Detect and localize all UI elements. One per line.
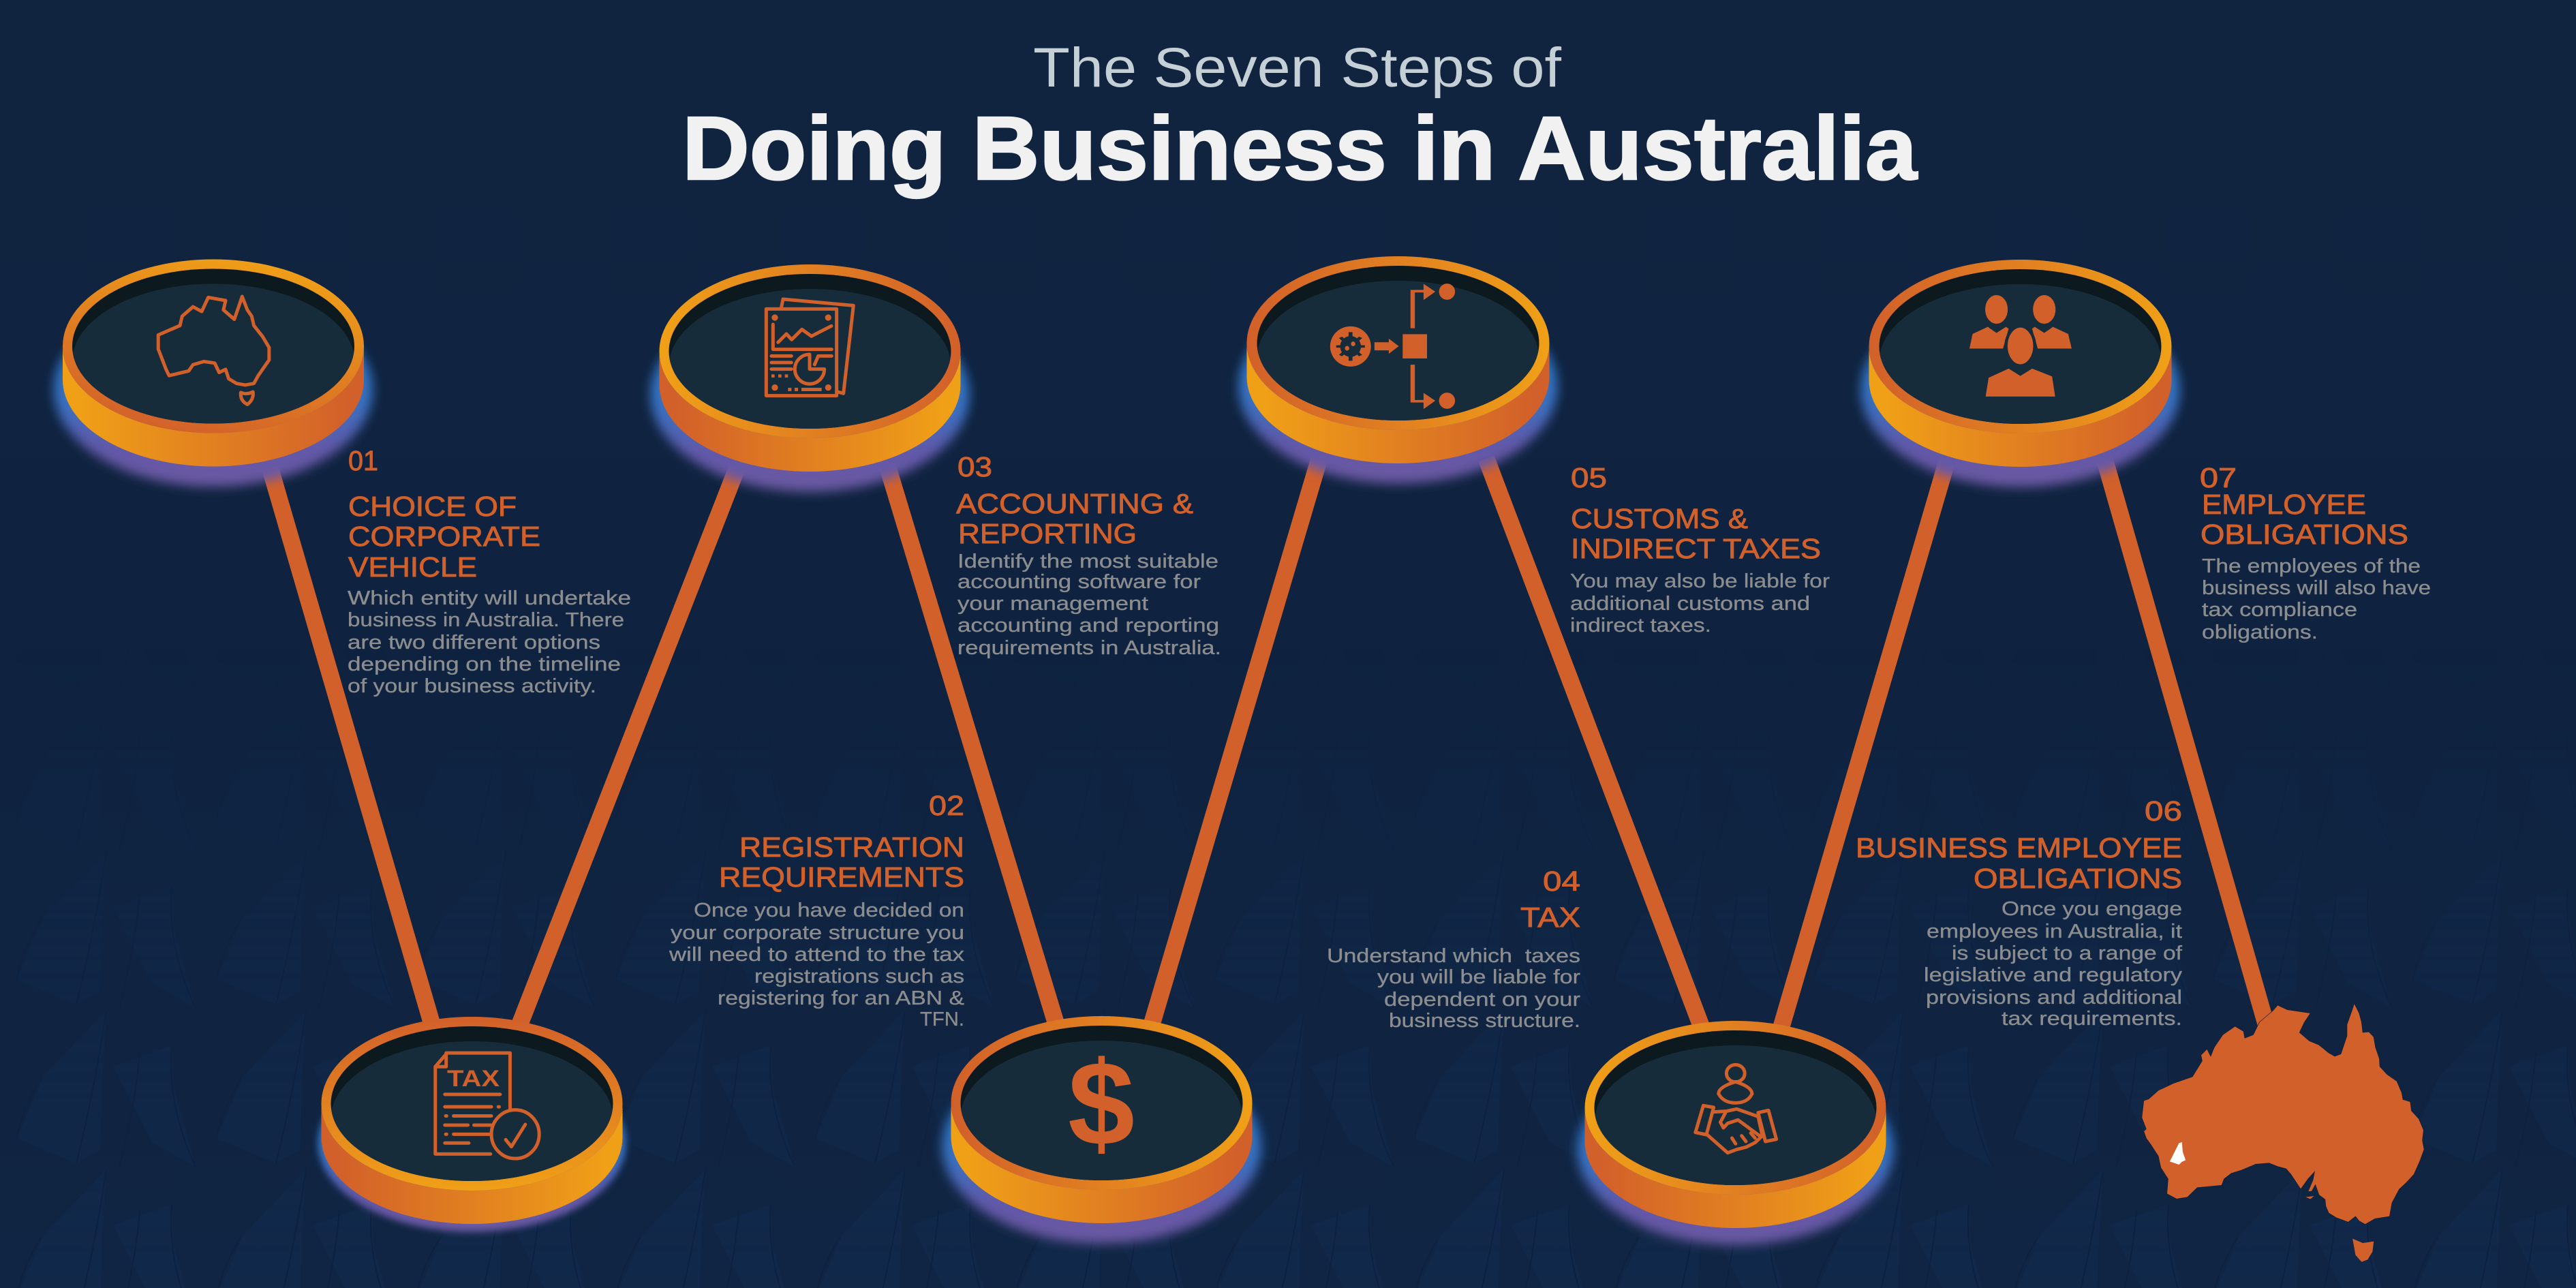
connecting zigzag lines: [266, 453, 2269, 1036]
step heading: ACCOUNTING &: [956, 488, 1193, 519]
step heading: CORPORATE: [348, 521, 540, 552]
step heading: [2201, 489, 2408, 550]
step description: indirect taxes.: [1570, 615, 1711, 637]
step description: dependent on your: [1384, 989, 1580, 1011]
step description: provisions and additional: [1926, 987, 2182, 1009]
step description: You may also be liable for: [1570, 570, 1830, 592]
step heading: BUSINESS EMPLOYEE: [1856, 832, 2182, 863]
step description: The employees of the: [2202, 555, 2421, 577]
step heading: [348, 491, 540, 583]
step description: [957, 551, 1221, 659]
text block: step 04: [1327, 865, 1580, 1032]
step description: is subject to a range of: [1952, 942, 2183, 964]
step number: 07: [2200, 462, 2237, 493]
icon label: TAX: TAX: [447, 1066, 500, 1092]
step description: [669, 900, 965, 1030]
step description: accounting and reporting: [957, 615, 1219, 637]
step heading: REGISTRATION: [739, 831, 964, 863]
icon: tax document: [435, 1053, 539, 1159]
step heading: VEHICLE: [348, 551, 477, 583]
step description: Once you have decided on: [694, 900, 964, 921]
step description: accounting software for: [957, 571, 1201, 593]
step heading: OBLIGATIONS: [2201, 519, 2408, 550]
step number: 05: [1571, 462, 1607, 493]
step number: 03: [957, 451, 992, 482]
step description: are two different options: [348, 632, 600, 654]
step description: tax requirements.: [2002, 1008, 2182, 1030]
step number: 02: [929, 790, 964, 821]
step heading: REQUIREMENTS: [719, 861, 964, 893]
text block: step 03: [956, 451, 1221, 659]
step description: obligations.: [2202, 622, 2318, 643]
step description: business in Australia. There: [348, 609, 624, 631]
step heading: OBLIGATIONS: [1974, 863, 2182, 894]
icon: dollar sign: $: [1068, 1037, 1135, 1171]
text block: step 06: [1856, 795, 2183, 1030]
step description: tax compliance: [2202, 599, 2357, 621]
step description: Which entity will undertake: [348, 587, 631, 609]
map of Australia: [2142, 1003, 2424, 1262]
step heading: CUSTOMS &: [1571, 503, 1748, 534]
step number: 06: [2145, 795, 2182, 827]
step description: requirements in Australia.: [957, 637, 1221, 659]
icon: handshake with person: [1696, 1064, 1777, 1153]
step description: depending on the timeline: [348, 654, 621, 675]
step heading: INDIRECT TAXES: [1571, 533, 1821, 564]
step description: Once you engage: [2002, 898, 2182, 920]
step heading: [1571, 503, 1821, 564]
step description: business will also have: [2202, 577, 2431, 599]
step disk 4: [942, 1016, 1261, 1243]
step description: TFN.: [920, 1009, 964, 1030]
text block: step 01: [348, 445, 631, 697]
step description: Identify the most suitable: [957, 551, 1218, 572]
icon: Australia outline: [158, 296, 269, 404]
step number: 04: [1543, 865, 1580, 897]
step description: [1924, 898, 2183, 1030]
step description: registering for an ABN &: [718, 987, 964, 1009]
icon: white sails: [2170, 1142, 2186, 1165]
step description: of your business activity.: [348, 675, 596, 697]
step disk 7: [1860, 260, 2179, 487]
step number: 01: [348, 445, 378, 476]
step description: legislative and regulatory: [1924, 964, 2183, 986]
step description: [1327, 945, 1580, 1032]
step disk 3: [650, 264, 969, 492]
step description: your management: [957, 593, 1148, 615]
step description: [1570, 570, 1830, 637]
step disk 1: [54, 259, 373, 487]
step heading: [956, 488, 1193, 549]
step description: you will be liable for: [1377, 966, 1580, 988]
step disk 2: [318, 1017, 626, 1232]
step heading: TAX: [1520, 902, 1580, 933]
step heading: CHOICE OF: [348, 491, 517, 522]
title: [682, 37, 1918, 198]
main heading: Doing Business in Australia: [682, 98, 1918, 198]
step disk 6: [1577, 1021, 1893, 1244]
step description: Understand which taxes: [1327, 945, 1580, 967]
step disk 5: [1239, 256, 1558, 484]
step heading: EMPLOYEE: [2202, 489, 2366, 520]
subtitle: The Seven Steps of: [1033, 37, 1561, 99]
step heading: [719, 831, 964, 893]
text block: step 07: [2200, 462, 2431, 643]
step description: will need to attend to the tax: [669, 944, 965, 966]
icon: customs flow diagram: [1330, 283, 1455, 409]
step description: [2202, 555, 2431, 643]
step description: business structure.: [1389, 1010, 1580, 1032]
step description: [348, 587, 631, 697]
text block: step 02: [669, 790, 965, 1030]
step description: registrations such as: [754, 966, 964, 987]
step heading: REPORTING: [958, 518, 1137, 549]
step description: your corporate structure you: [671, 922, 964, 944]
step description: additional customs and: [1570, 593, 1810, 615]
icon: reports and charts: [766, 299, 853, 396]
icon: three employees: [1969, 295, 2072, 397]
step heading: [1856, 832, 2182, 894]
step description: employees in Australia, it: [1927, 921, 2182, 942]
text block: step 05: [1570, 462, 1830, 637]
